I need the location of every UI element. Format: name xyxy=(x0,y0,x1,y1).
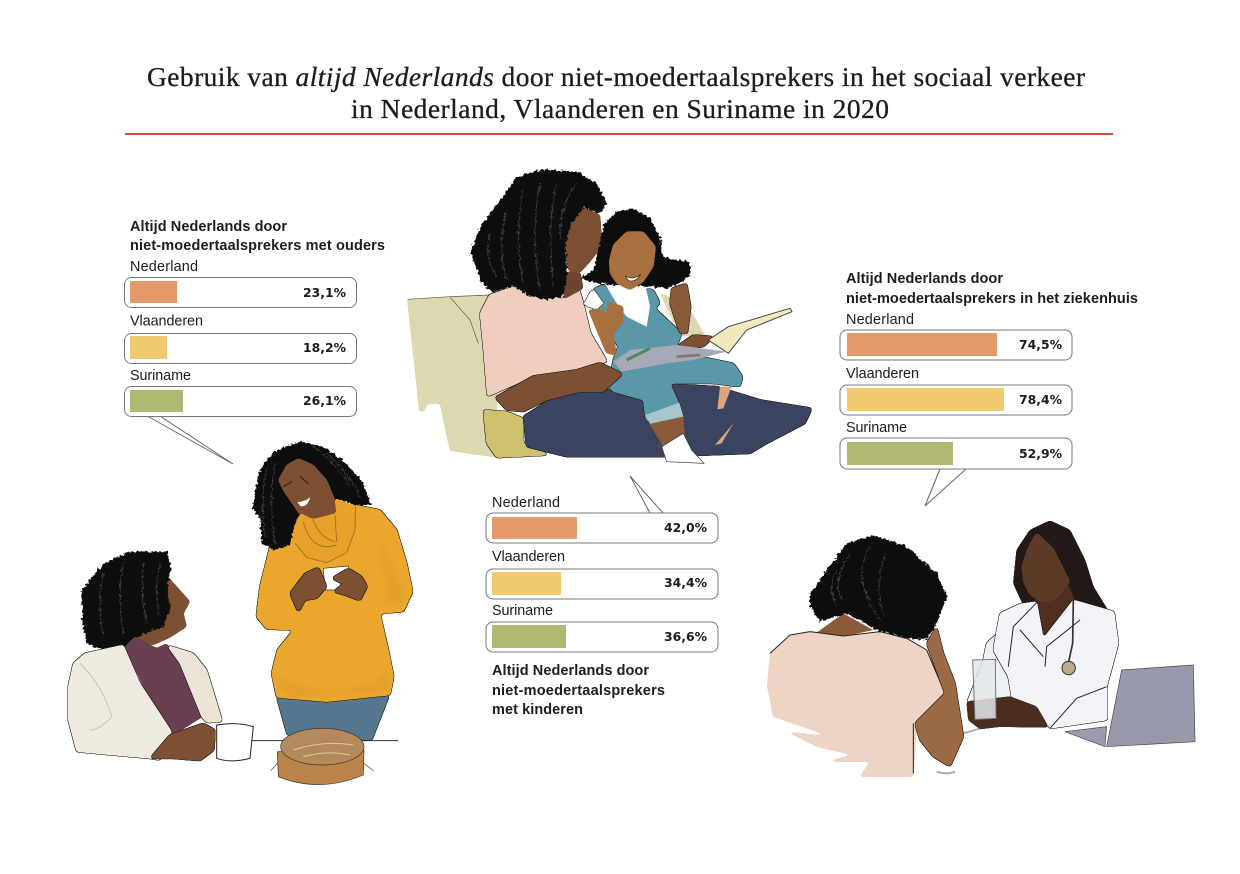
row: Suriname 52,9%: 52,9% xyxy=(1019,446,1063,461)
row: Nederland 42,0%: 42,0% xyxy=(664,520,708,535)
ripped jeans xyxy=(715,387,733,445)
doctor xyxy=(967,521,1118,729)
cardigan left xyxy=(68,645,172,760)
title: in Nederland, Vlaanderen en Suriname in 2020 xyxy=(351,93,889,124)
panel: in het ziekenhuis xyxy=(840,271,1138,506)
row: Vlaanderen 18,2%: Vlaanderen xyxy=(130,314,203,330)
row: Suriname 36,6% xyxy=(486,603,718,652)
row: Nederland 74,5%: Nederland xyxy=(846,312,914,328)
title xyxy=(147,61,1085,124)
row: Vlaanderen 34,4%: Vlaanderen xyxy=(492,549,565,565)
child smile xyxy=(625,274,641,281)
mother top xyxy=(480,275,607,397)
child leg xyxy=(649,417,685,447)
mother hair xyxy=(470,169,607,299)
heading: met kinderen: met kinderen xyxy=(492,702,583,718)
callout tail: met kinderen xyxy=(630,476,663,513)
row: Suriname 26,1% xyxy=(124,368,356,416)
mug xyxy=(217,724,253,761)
child arm right xyxy=(670,283,691,333)
patient arm xyxy=(915,627,963,767)
mother arm xyxy=(495,363,623,412)
glass xyxy=(973,659,996,719)
patient neck xyxy=(813,613,873,637)
row: Vlaanderen 18,2% xyxy=(124,314,356,364)
row: Suriname 26,1%: 26,1% xyxy=(303,393,347,408)
row: Vlaanderen 34,4% xyxy=(486,549,718,599)
row: Nederland 42,0% xyxy=(486,495,718,543)
coat left sleeve xyxy=(967,623,1011,703)
row: Nederland 74,5% xyxy=(840,312,1072,360)
eyes and brow lines xyxy=(283,477,308,487)
stethoscope xyxy=(1068,600,1073,663)
sweater shading xyxy=(273,540,407,697)
child face xyxy=(609,232,656,290)
cardigan folds xyxy=(80,663,112,730)
cowl scarf xyxy=(294,498,356,563)
child overalls xyxy=(593,284,743,422)
row: Suriname 26,1%: Suriname xyxy=(130,368,191,384)
row: Nederland 23,1%: Nederland xyxy=(130,259,198,275)
left hand xyxy=(290,567,327,613)
turtleneck xyxy=(125,637,203,735)
mother face xyxy=(565,207,602,273)
child cuff xyxy=(645,403,683,424)
row: Nederland 74,5%: 74,5% xyxy=(1019,337,1063,352)
cake xyxy=(271,728,373,785)
mug xyxy=(323,566,348,590)
heading: in het ziekenhuis: Altijd Nederlands door xyxy=(846,271,1003,287)
row: Nederland 23,1%: 23,1% xyxy=(303,285,347,300)
hair xyxy=(82,552,172,650)
row: Suriname 52,9%: Suriname xyxy=(846,420,907,436)
heading: met kinderen: niet-moedertaalsprekers xyxy=(492,683,665,699)
callout tail: met ouders xyxy=(148,416,233,464)
hair xyxy=(253,442,372,551)
mother hand right xyxy=(677,335,714,349)
row: Suriname 36,6%: Suriname xyxy=(492,603,553,619)
child hair xyxy=(580,208,690,288)
hand xyxy=(150,723,215,761)
heading: in het ziekenhuis: niet-moedertaalsprekers in het ziekenhuis xyxy=(846,291,1138,307)
coat lapels xyxy=(1008,603,1107,728)
cardigan right xyxy=(167,645,222,723)
jeans xyxy=(277,695,389,740)
laptop xyxy=(1065,665,1195,747)
sofa xyxy=(407,293,705,457)
doctor hair xyxy=(1013,521,1109,613)
heading: met kinderen: Altijd Nederlands door xyxy=(492,663,649,679)
child sleeve xyxy=(583,289,604,310)
row: Nederland 42,0%: Nederland xyxy=(492,495,560,511)
face xyxy=(278,458,336,520)
row: Vlaanderen 78,4%: 78,4% xyxy=(1019,392,1063,407)
patient xyxy=(767,535,963,777)
sweater xyxy=(256,505,413,702)
heading: met ouders: niet-moedertaalsprekers met ouders xyxy=(130,238,385,254)
book xyxy=(613,308,792,372)
row: Vlaanderen 34,4%: 34,4% xyxy=(664,575,708,590)
face xyxy=(127,570,190,645)
heading: in het ziekenhuis xyxy=(846,271,1138,307)
row: Nederland 23,1% xyxy=(124,259,356,308)
row: Suriname 52,9% xyxy=(840,420,1072,469)
title: Gebruik van altijd Nederlands door niet-moedertaalsprekers in het sociaal verkeer xyxy=(147,61,1085,92)
sock xyxy=(662,433,704,463)
right hand xyxy=(332,568,367,601)
patient top xyxy=(767,632,945,777)
child arm left xyxy=(588,302,623,356)
patient hair xyxy=(810,535,947,640)
doctor face xyxy=(1022,533,1070,603)
illustration: patient talking with doctor xyxy=(767,521,1195,777)
row: Vlaanderen 18,2%: 18,2% xyxy=(303,340,347,355)
illustration: mother and daughter drinking coffee with cake xyxy=(68,442,413,785)
doctor hand xyxy=(967,697,1049,729)
panel: met ouders xyxy=(124,219,385,464)
heading: met ouders: Altijd Nederlands door xyxy=(130,219,287,235)
illustration: mother reading to child on sofa xyxy=(407,169,812,463)
table line xyxy=(250,739,398,742)
row: Suriname 36,6%: 36,6% xyxy=(664,629,708,644)
heading: met ouders xyxy=(130,219,385,254)
jeans xyxy=(523,383,812,457)
pillow xyxy=(483,410,550,458)
panel: met kinderen xyxy=(486,476,718,718)
coat xyxy=(993,600,1118,728)
doctor neck xyxy=(1035,585,1075,639)
standing woman xyxy=(253,442,413,740)
mother neck xyxy=(563,272,583,299)
callout tail: in het ziekenhuis xyxy=(925,469,966,506)
table shadow xyxy=(937,727,987,773)
child shirt xyxy=(604,283,650,327)
row: Vlaanderen 78,4%: Vlaanderen xyxy=(846,366,919,382)
row: Vlaanderen 78,4% xyxy=(840,366,1072,415)
smile xyxy=(297,497,310,506)
seated woman xyxy=(68,552,253,761)
heading: met kinderen xyxy=(492,663,665,718)
